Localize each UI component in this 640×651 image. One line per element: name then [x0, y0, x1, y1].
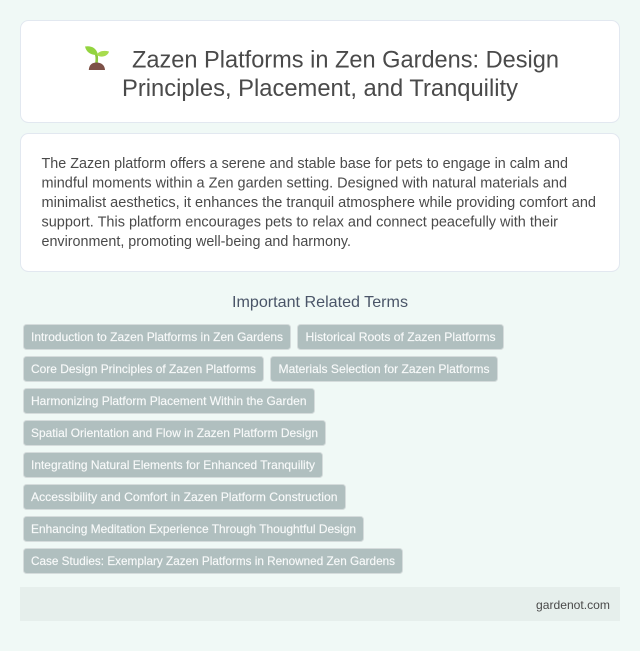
tag: [24, 516, 364, 542]
title: Zazen Platforms in Zen Gardens: Design: [132, 46, 559, 74]
tag list: [24, 324, 504, 574]
text block: description: The Zazen platform offers a serene and stable base for pets to engage in calm and: [42, 156, 568, 172]
title: Principles, Placement, and Tranquility: [122, 75, 519, 102]
tag: [24, 452, 322, 478]
panel: title card: [20, 20, 620, 122]
tag: [24, 324, 290, 350]
tag: Integrating Natural Elements for Enhanced Tranquility: [31, 458, 315, 472]
tag: [270, 356, 498, 382]
text block: description: support. This platform encourages pets to relax and connect peacefully with their: [42, 214, 558, 230]
tag: [24, 484, 346, 510]
tag: Enhancing Meditation Experience Through Thoughtful Design: [31, 522, 356, 536]
tag: Historical Roots of Zazen Platforms: [306, 330, 496, 344]
heading: important related terms: Important Related Terms: [232, 294, 408, 311]
footer: [20, 587, 620, 621]
tag: [24, 388, 314, 414]
tag: Introduction to Zazen Platforms in Zen Gardens: [31, 330, 283, 344]
text block: description: [42, 156, 596, 250]
panel: description: [20, 134, 620, 272]
tag: Case Studies: Exemplary Zazen Platforms in Renowned Zen Gardens: [31, 554, 395, 568]
text block: description: mindful moments within a Zen garden setting. Designed with natural materials and: [42, 176, 567, 192]
text block: description: minimalist aesthetics, it enhances the tranquil atmosphere while providing comfort and: [42, 195, 596, 211]
tag: Spatial Orientation and Flow in Zazen Platform Design: [31, 426, 318, 440]
tag: [24, 420, 326, 446]
tag: Materials Selection for Zazen Platforms: [278, 362, 490, 376]
text block: description: environment, promoting well-being and harmony.: [42, 234, 351, 250]
tag: Accessibility and Comfort in Zazen Platform Construction: [31, 490, 337, 504]
tag: [24, 548, 402, 574]
icon: sprout: [85, 46, 109, 70]
tag: Core Design Principles of Zazen Platforms: [31, 362, 256, 376]
title: [122, 46, 559, 102]
tag: Harmonizing Platform Placement Within the Garden: [31, 394, 307, 408]
tag: [24, 356, 264, 382]
tag: [298, 324, 504, 350]
footer text: gardenot.com: [536, 598, 610, 612]
